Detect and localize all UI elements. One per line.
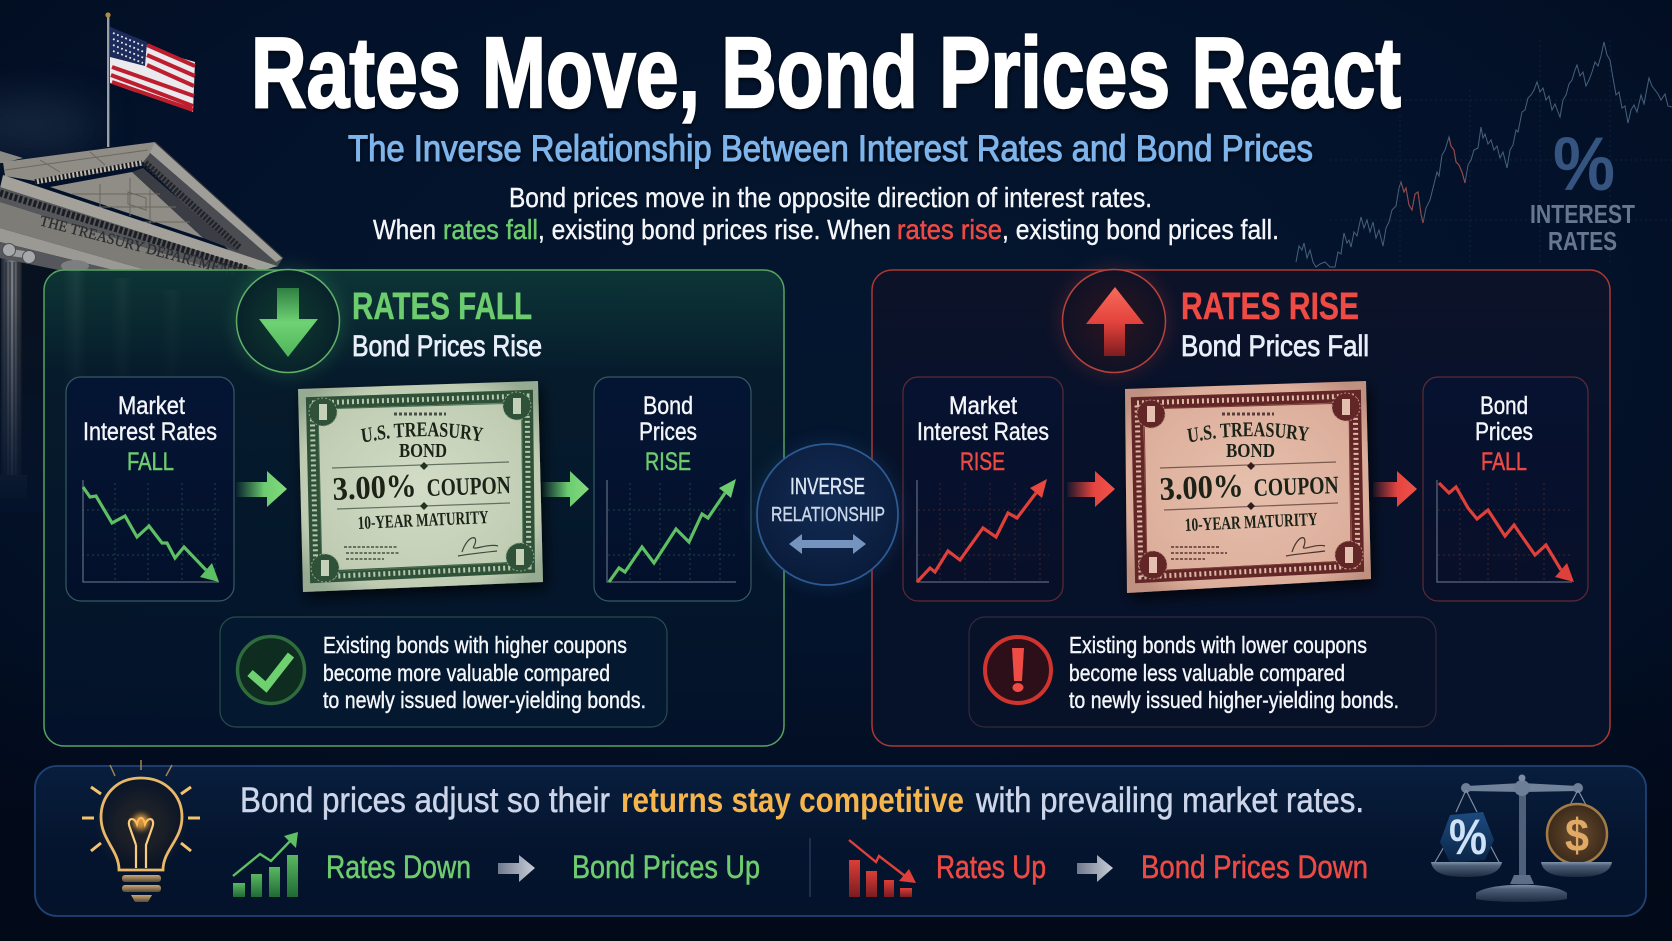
badge: inverse relationship: [754, 440, 902, 588]
icon: alert: [985, 637, 1051, 703]
card: bond prices rise: RISE: [645, 448, 691, 476]
callout: rates fall explanation: to newly issued lower-yielding bonds.: [323, 687, 646, 713]
icon: light bulb: [82, 760, 200, 902]
callout: rates rise explanation: become less valuable compared: [1069, 660, 1345, 686]
chart: rising line: [607, 479, 736, 582]
intro text: , existing bond prices rise. When: [538, 214, 891, 245]
text: takeaway sentence: Bond prices adjust so their: [240, 781, 610, 820]
percent weight: %: [1449, 809, 1487, 865]
heading: rates fall: Bond Prices Rise: [352, 330, 542, 363]
icon: percent interest rates label: RATES: [1548, 226, 1617, 256]
bond seals: [309, 392, 534, 582]
arrow: bond to prices: [542, 471, 589, 507]
text: bond prices down: Bond Prices Down: [1141, 849, 1368, 885]
icon: american flag: [105, 12, 195, 147]
intro text: rates rise: [897, 214, 1002, 245]
illustration: red treasury bond: U.S. TREASURY: [1186, 422, 1310, 442]
illustration: red treasury bond: 10-YEAR MATURITY: [1184, 510, 1319, 536]
intro text: [373, 182, 1279, 245]
card: market interest rates rise: Interest Rates: [917, 418, 1049, 446]
badge: inverse relationship: RELATIONSHIP: [771, 503, 885, 526]
heading: rates rise: [1181, 286, 1369, 363]
panel: rates fall: [43, 262, 785, 747]
intro text: rates fall: [443, 214, 538, 245]
heading: rates rise: RATES RISE: [1181, 286, 1359, 328]
illustration: green treasury bond: [297, 381, 550, 602]
illustration: treasury building: [0, 142, 283, 512]
card: bond prices fall: [1423, 377, 1588, 601]
card: bond prices fall: Prices: [1475, 418, 1533, 446]
dollar coin: [1547, 804, 1607, 864]
arrow: to bond prices down: [1077, 855, 1113, 882]
card: bond prices fall: FALL: [1481, 448, 1527, 476]
intro text: Bond prices move in the opposite direction of interest rates.: [509, 182, 1152, 213]
text: takeaway sentence: with prevailing market rates.: [975, 781, 1364, 820]
text: rates up: Rates Up: [936, 849, 1046, 885]
icon: check mark: [238, 636, 304, 704]
icon: down arrow badge: [232, 265, 344, 377]
card: bond prices rise: Prices: [639, 418, 697, 446]
illustration: green treasury bond: U.S. TREASURY: [360, 422, 484, 442]
illustration: green treasury bond: 10-YEAR MATURITY: [357, 508, 490, 534]
callout: rates rise explanation: [969, 617, 1436, 727]
icon: up arrow badge: [1058, 265, 1170, 377]
illustration: red treasury bond: COUPON: [1253, 472, 1339, 502]
subtitle: The Inverse Relationship Between Interest Rates and Bond Prices: [348, 128, 1313, 169]
intro text: , existing bond prices fall.: [1002, 214, 1279, 245]
card: market interest rates fall: [66, 377, 234, 601]
text: rates down: Rates Down: [326, 849, 471, 885]
arrow: to bond prices up: [498, 855, 535, 882]
card: bond prices rise: Bond: [643, 392, 693, 420]
callout: rates fall explanation: [220, 617, 667, 727]
callout: rates fall explanation: Existing bonds with higher coupons: [323, 632, 627, 658]
callout: rates fall explanation: become more valuable compared: [323, 660, 610, 686]
panel: takeaway: [35, 760, 1646, 916]
panel: rates rise: [871, 260, 1611, 747]
illustration: red treasury bond: 3.00%: [1159, 468, 1244, 508]
card: market interest rates fall: FALL: [127, 448, 174, 476]
card: market interest rates fall: Interest Rates: [83, 418, 217, 446]
arrow: market to bond red: [1067, 471, 1115, 507]
chart: falling line red: [1437, 480, 1574, 582]
card: market interest rates fall: Market: [118, 392, 185, 420]
card: market interest rates rise: RISE: [960, 448, 1005, 476]
icon: balance scale: [1431, 774, 1612, 902]
building columns: [0, 250, 182, 499]
illustration: green treasury bond: 3.00%: [332, 468, 417, 508]
background stock chart with grid: [1296, 40, 1672, 267]
card: bond prices fall: Bond: [1480, 392, 1528, 420]
icon: rising bars: [233, 832, 298, 897]
heading: rates fall: [352, 286, 542, 363]
dollar coin: $: [1565, 809, 1589, 861]
illustration: green treasury bond: BOND: [399, 440, 447, 462]
arrow: bond to prices red: [1373, 471, 1417, 507]
callout: rates rise explanation: to newly issued higher-yielding bonds.: [1069, 687, 1399, 713]
bond seals red: [1137, 393, 1363, 579]
heading: rates rise: Bond Prices Fall: [1181, 330, 1369, 363]
text: bond prices up: Bond Prices Up: [572, 849, 760, 885]
chart: rising line red: [917, 479, 1049, 582]
icon: percent interest rates label: %: [1553, 122, 1615, 207]
heading: rates fall: RATES FALL: [352, 286, 532, 328]
illustration: red treasury bond: [1124, 381, 1378, 602]
arrow: market to bond: [236, 471, 287, 507]
icon: falling bars: [849, 840, 916, 897]
illustration: green treasury bond: COUPON: [426, 472, 511, 502]
card: market interest rates rise: Market: [949, 392, 1017, 420]
illustration: red treasury bond: BOND: [1226, 440, 1275, 462]
text: takeaway sentence: returns stay competitive: [621, 781, 964, 820]
text: takeaway sentence: [240, 781, 1364, 820]
badge: inverse relationship: INVERSE: [790, 473, 865, 499]
icon: percent interest rates label: [1530, 122, 1635, 256]
intro text: When: [373, 214, 436, 245]
card: bond prices rise: [594, 377, 751, 601]
icon: percent interest rates label: INTEREST: [1530, 199, 1635, 229]
card: market interest rates rise: [903, 377, 1063, 601]
text: building inscription: THE TREASURY DEPARTMENT: [38, 213, 240, 281]
callout: rates rise explanation: Existing bonds with lower coupons: [1069, 632, 1367, 658]
arrow: double headed: [789, 534, 866, 554]
chart: falling line: [82, 480, 219, 582]
